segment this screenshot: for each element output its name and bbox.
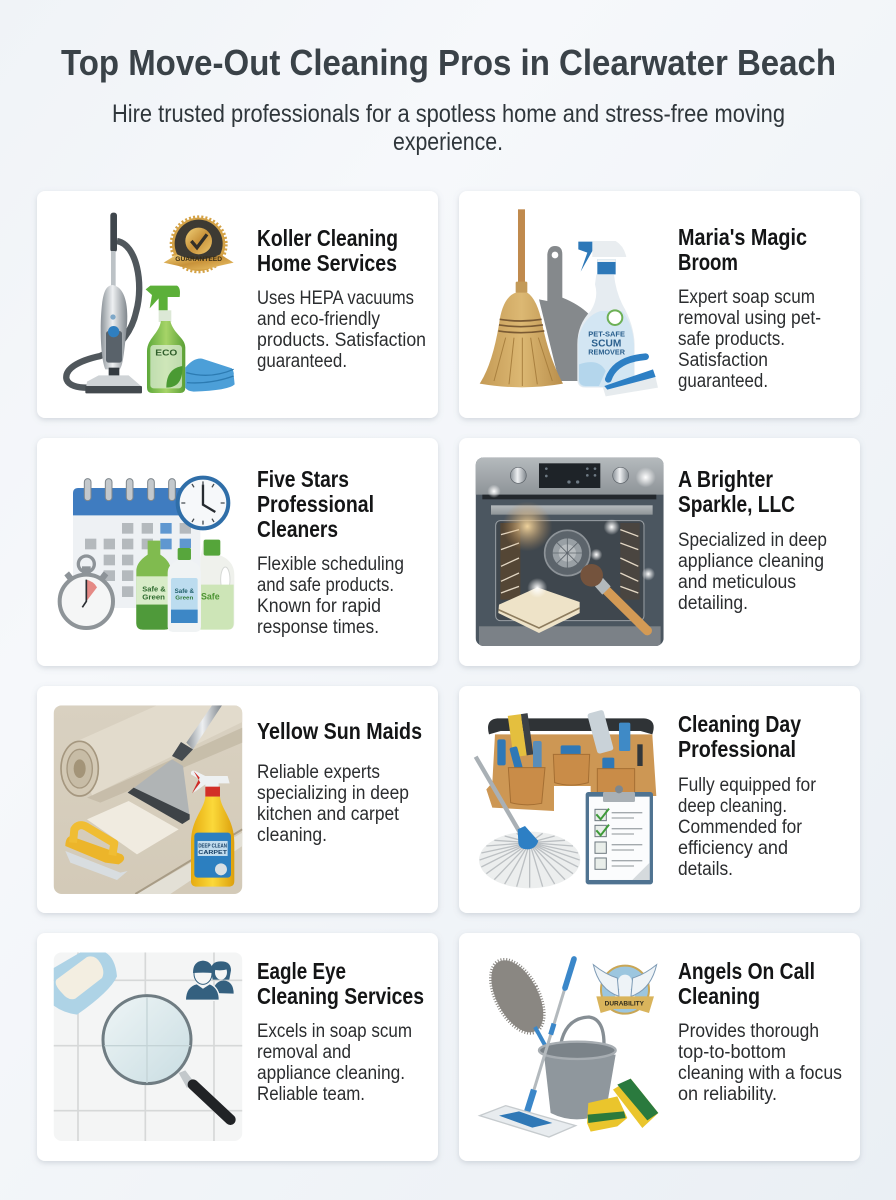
illustration: tool belt, mop and checklist <box>476 710 656 888</box>
description <box>257 554 404 638</box>
panel: Cleaning Day Professional <box>459 686 860 913</box>
illustration: carpet, steam nozzle, brush and cleaner: CARPET <box>198 850 228 856</box>
illustration: clean oven with cloth and brush <box>476 457 664 646</box>
subtitle: experience. <box>393 128 503 156</box>
heading: Yellow Sun Maids <box>257 718 422 744</box>
description: guaranteed. <box>678 371 768 392</box>
description: removal using pet- <box>678 308 821 329</box>
description <box>678 287 821 392</box>
heading: Cleaning Services <box>257 983 424 1009</box>
description <box>678 775 817 880</box>
description: specializing in deep <box>257 783 409 804</box>
panel: A Brighter Sparkle, LLC <box>459 438 860 666</box>
description: products. Satisfaction <box>257 330 426 351</box>
illustration: broom, dustpan, spray and scrub brush <box>480 209 658 396</box>
description: Reliable experts <box>257 762 380 783</box>
illustration: carpet, steam nozzle, brush and cleaner: DEEP CLEAN <box>198 844 227 850</box>
description: Fully equipped for <box>678 775 817 796</box>
illustration: calendar, clock, stopwatch and bottles: Safe <box>201 592 220 602</box>
description <box>257 288 426 372</box>
heading <box>678 958 815 1009</box>
description: kitchen and carpet <box>257 804 400 825</box>
heading: Home Services <box>257 250 397 276</box>
description: top-to-bottom <box>678 1042 786 1063</box>
description: Excels in soap scum <box>257 1021 412 1042</box>
heading: Eagle Eye <box>257 958 346 984</box>
illustration: calendar, clock, stopwatch and bottles <box>60 478 234 632</box>
description: Expert soap scum <box>678 287 815 308</box>
panel: Angels On Call Cleaning <box>459 933 860 1161</box>
description: response times. <box>257 617 379 638</box>
description: Known for rapid <box>257 596 381 617</box>
subtitle: Hire trusted professionals for a spotless home and stress-free moving <box>112 100 785 128</box>
heading: Maria's Magic <box>678 224 807 250</box>
description: efficiency and <box>678 838 788 859</box>
heading <box>678 224 807 275</box>
description: appliance cleaning <box>678 551 824 572</box>
heading <box>257 466 374 542</box>
description: guaranteed. <box>257 351 347 372</box>
heading: Cleaning <box>678 983 760 1009</box>
panel: Five Stars Professional Cleaners <box>37 438 438 666</box>
panel: Eagle Eye Cleaning Services <box>37 933 438 1161</box>
illustration: calendar, clock, stopwatch and bottles: Safe & <box>142 584 166 593</box>
heading: Sparkle, LLC <box>678 491 795 517</box>
description: and meticulous <box>678 572 796 593</box>
description <box>257 1021 412 1105</box>
description: on reliability. <box>678 1084 777 1105</box>
heading: Cleaning Day <box>678 711 801 737</box>
subtitle <box>112 100 785 156</box>
description: appliance cleaning. <box>257 1063 405 1084</box>
description: cleaning with a focus <box>678 1063 842 1084</box>
description <box>257 762 409 846</box>
description: removal and <box>257 1042 351 1063</box>
description: cleaning. <box>257 825 327 846</box>
description: deep cleaning. <box>678 796 787 817</box>
heading: A Brighter <box>678 466 773 492</box>
illustration: calendar, clock, stopwatch and bottles: Green <box>142 593 166 602</box>
illustration: carpet, steam nozzle, brush and cleaner <box>54 705 242 894</box>
heading: Koller Cleaning <box>257 225 398 251</box>
illustration: calendar, clock, stopwatch and bottles: Green <box>175 596 193 602</box>
heading <box>257 225 398 276</box>
panel: Maria's Magic Broom <box>459 191 860 418</box>
illustration: broom, dustpan, spray and scrub brush: REMOVER <box>588 349 625 356</box>
illustration: broom, dustpan, spray and scrub brush: PET-SAFE <box>588 329 625 338</box>
description: Uses HEPA vacuums <box>257 288 414 309</box>
heading <box>678 711 801 762</box>
description <box>678 1021 842 1105</box>
description: safe products. <box>678 329 785 350</box>
heading: Angels On Call <box>678 958 815 984</box>
panel: Koller Cleaning Home Services <box>37 191 438 418</box>
description: Provides thorough <box>678 1021 819 1042</box>
heading <box>257 958 424 1009</box>
illustration: duster, bucket, mop, sponges and wing badge: DURABILITY <box>605 1001 645 1008</box>
heading: Professional <box>257 491 374 517</box>
illustration: tiles, magnifying glass, soap and team icon <box>54 952 242 1141</box>
heading: Five Stars <box>257 466 349 492</box>
description: detailing. <box>678 593 748 614</box>
heading: Broom <box>678 249 738 275</box>
description: details. <box>678 859 733 880</box>
illustration: duster, bucket, mop, sponges and wing badge <box>480 952 658 1137</box>
illustration: vacuum, eco spray, cloth and guarantee badge: GUARANTEED <box>175 256 222 263</box>
heading: Cleaners <box>257 516 338 542</box>
description: and safe products. <box>257 575 394 596</box>
illustration: vacuum, eco spray, cloth and guarantee badge <box>66 213 235 393</box>
description: Specialized in deep <box>678 530 827 551</box>
description: and eco-friendly <box>257 309 380 330</box>
description: Flexible scheduling <box>257 554 404 575</box>
illustration: broom, dustpan, spray and scrub brush: SCUM <box>591 338 621 349</box>
description <box>678 530 827 614</box>
description: Commended for <box>678 817 803 838</box>
illustration: vacuum, eco spray, cloth and guarantee badge: ECO <box>155 347 178 357</box>
illustration: calendar, clock, stopwatch and bottles: Safe & <box>175 589 195 595</box>
heading: Professional <box>678 736 796 762</box>
description: Reliable team. <box>257 1084 365 1105</box>
description: Satisfaction <box>678 350 768 371</box>
title: Top Move-Out Cleaning Pros in Clearwater Beach <box>61 42 836 83</box>
panel: Yellow Sun Maids <box>37 686 438 913</box>
heading <box>678 466 795 517</box>
